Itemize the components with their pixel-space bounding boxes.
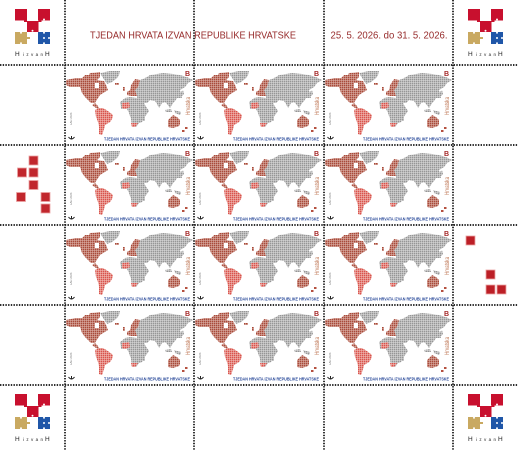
stamp r1c3: B <box>444 71 449 78</box>
stamp r3c3: B <box>444 231 449 238</box>
stamp r4c3: Hrvatska <box>445 336 451 355</box>
logo: top left: izvan <box>23 52 43 57</box>
logo: bottom right: H <box>468 436 473 443</box>
stamp r2c2: B <box>314 151 319 158</box>
logo: top right: H <box>498 51 503 58</box>
stamp r1c2: TJEDAN HRVATA IZVAN REPUBLIKE HRVATSKE <box>233 136 319 142</box>
logo: bottom left <box>15 394 50 443</box>
stamp r4c1 <box>66 311 193 382</box>
left decorative squares <box>16 156 50 213</box>
stamp r2c3 <box>325 151 452 222</box>
logo: bottom right: izvan <box>476 437 496 442</box>
stamp r4c2 <box>195 311 322 382</box>
logo: top right: H <box>468 51 473 58</box>
stamp r3c1: Hrvatska <box>186 256 192 275</box>
stamp r1c3: LAH 2026 <box>328 112 332 125</box>
stamp r1c1: LAH 2026 <box>69 112 73 125</box>
stamp r1c1 <box>66 71 193 142</box>
stamp r2c1: TJEDAN HRVATA IZVAN REPUBLIKE HRVATSKE <box>104 216 190 222</box>
stamp r4c1: LAH 2026 <box>69 352 73 365</box>
stamp r3c1: B <box>185 231 190 238</box>
stamp r3c3 <box>325 231 452 302</box>
stamp r2c1: Hrvatska <box>186 176 192 195</box>
stamp r3c1: LAH 2026 <box>69 272 73 285</box>
logo: top left: H <box>15 51 20 58</box>
stamp r1c3: TJEDAN HRVATA IZVAN REPUBLIKE HRVATSKE <box>363 136 449 142</box>
logo: bottom left: izvan <box>23 437 43 442</box>
logo: bottom right: H <box>498 436 503 443</box>
stamp r1c2: LAH 2026 <box>198 112 202 125</box>
logo: bottom right <box>468 394 503 443</box>
stamp r2c2: LAH 2026 <box>198 192 202 205</box>
stamp r3c2: B <box>314 231 319 238</box>
logo: top left: H <box>45 51 50 58</box>
stamp r3c1: TJEDAN HRVATA IZVAN REPUBLIKE HRVATSKE <box>104 296 190 302</box>
stamp r3c2: TJEDAN HRVATA IZVAN REPUBLIKE HRVATSKE <box>233 296 319 302</box>
logo: top right: izvan <box>476 52 496 57</box>
right decorative squares <box>466 236 506 294</box>
stamp r3c2: Hrvatska <box>315 256 321 275</box>
stamp r3c2 <box>195 231 322 302</box>
stamp r3c3: LAH 2026 <box>328 272 332 285</box>
logo: top right <box>468 9 503 58</box>
stamp r4c2: TJEDAN HRVATA IZVAN REPUBLIKE HRVATSKE <box>233 376 319 382</box>
stamp r1c1: TJEDAN HRVATA IZVAN REPUBLIKE HRVATSKE <box>104 136 190 142</box>
stamp r4c3: TJEDAN HRVATA IZVAN REPUBLIKE HRVATSKE <box>363 376 449 382</box>
stamp r2c1: LAH 2026 <box>69 192 73 205</box>
stamp r4c1: B <box>185 311 190 318</box>
stamp r2c2 <box>195 151 322 222</box>
stamp r4c1: TJEDAN HRVATA IZVAN REPUBLIKE HRVATSKE <box>104 376 190 382</box>
logo: top left <box>15 9 50 58</box>
stamp r2c2: TJEDAN HRVATA IZVAN REPUBLIKE HRVATSKE <box>233 216 319 222</box>
stamp r2c1: B <box>185 151 190 158</box>
stamp r1c1: Hrvatska <box>186 96 192 115</box>
stamp r1c2 <box>195 71 322 142</box>
stamp r2c3: LAH 2026 <box>328 192 332 205</box>
stamp r2c2: Hrvatska <box>315 176 321 195</box>
stamp r3c3: TJEDAN HRVATA IZVAN REPUBLIKE HRVATSKE <box>363 296 449 302</box>
stamp r1c1: B <box>185 71 190 78</box>
stamp r4c3: B <box>444 311 449 318</box>
stamp r4c2: B <box>314 311 319 318</box>
stamp r1c2: Hrvatska <box>315 96 321 115</box>
stamp r4c1: Hrvatska <box>186 336 192 355</box>
title: TJEDAN HRVATA IZVAN REPUBLIKE HRVATSKE <box>90 30 296 42</box>
stamp r2c3: Hrvatska <box>445 176 451 195</box>
stamp r3c3: Hrvatska <box>445 256 451 275</box>
stamp r4c3 <box>325 311 452 382</box>
stamp r2c1 <box>66 151 193 222</box>
stamp r1c3: Hrvatska <box>445 96 451 115</box>
date: 25. 5. 2026. do 31. 5. 2026. <box>330 30 448 42</box>
stamp r1c2: B <box>314 71 319 78</box>
logo: bottom left: H <box>45 436 50 443</box>
logo: bottom left: H <box>15 436 20 443</box>
stamp r3c1 <box>66 231 193 302</box>
stamp r1c3 <box>325 71 452 142</box>
stamp r3c2: LAH 2026 <box>198 272 202 285</box>
stamp r4c2: Hrvatska <box>315 336 321 355</box>
stamp r4c2: LAH 2026 <box>198 352 202 365</box>
stamp r4c3: LAH 2026 <box>328 352 332 365</box>
stamp r2c3: B <box>444 151 449 158</box>
stamp r2c3: TJEDAN HRVATA IZVAN REPUBLIKE HRVATSKE <box>363 216 449 222</box>
